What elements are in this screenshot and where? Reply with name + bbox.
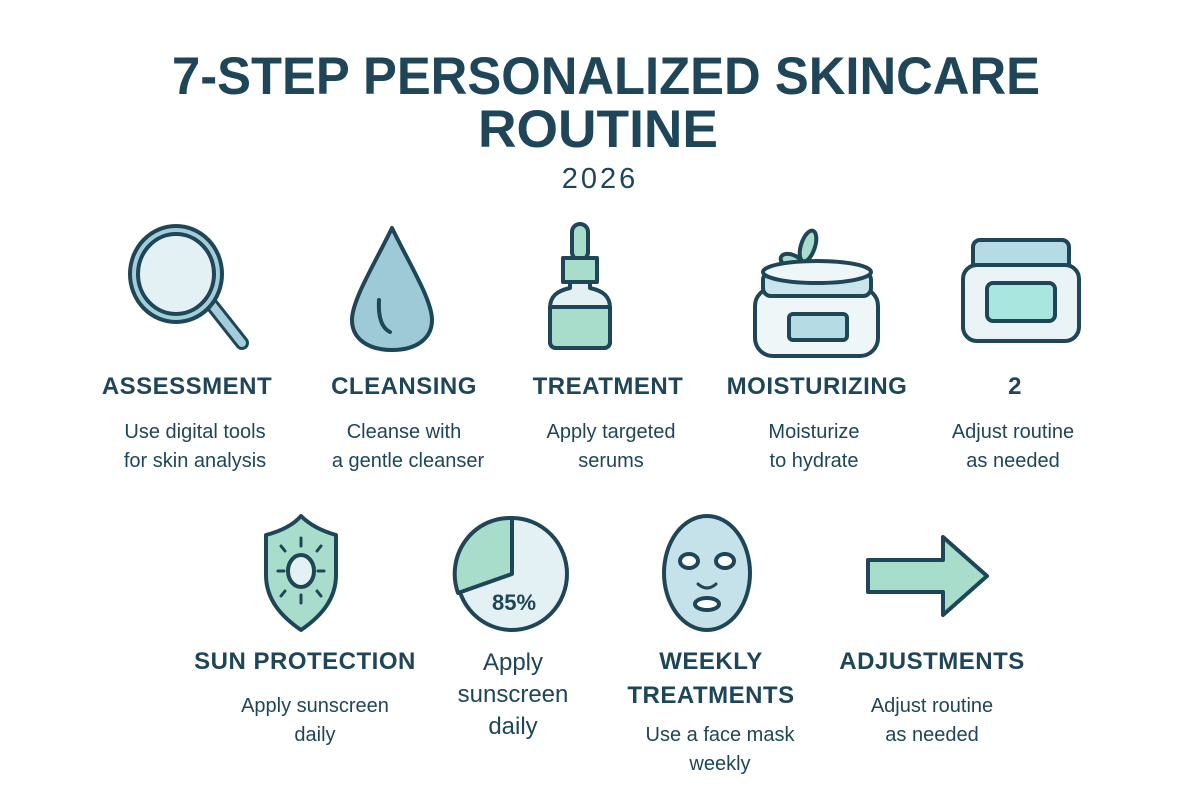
- step: 2: Adjust routine: [952, 421, 1074, 443]
- icon: water drop: [352, 228, 432, 350]
- step: sun protection: daily: [294, 724, 336, 746]
- step: treatment: [533, 373, 683, 472]
- step: apply sunscreen: Apply: [483, 649, 543, 676]
- step: moisturizing: [727, 373, 907, 472]
- step: assessment: for skin analysis: [124, 450, 266, 472]
- step: cleansing: Cleanse with: [347, 421, 461, 443]
- step: apply sunscreen: [458, 649, 568, 740]
- icon: magnifier: [130, 226, 242, 343]
- title: 7-STEP PERSONALIZED SKINCARE: [172, 47, 1040, 106]
- step: weekly treatments: TREATMENTS: [627, 682, 795, 709]
- step: apply sunscreen: sunscreen: [458, 681, 568, 708]
- step: adjustments: ADJUSTMENTS: [839, 648, 1025, 675]
- icon: face mask: [664, 516, 750, 630]
- icon: jar: [963, 240, 1079, 341]
- step: adjustments: as needed: [885, 724, 979, 746]
- step: cleansing: [331, 373, 484, 472]
- step: apply sunscreen: daily: [488, 713, 538, 740]
- step: moisturizing: MOISTURIZING: [727, 373, 907, 400]
- step: adjustments: Adjust routine: [871, 695, 993, 717]
- step: weekly treatments: WEEKLY: [659, 648, 763, 675]
- step: sun protection: SUN PROTECTION: [194, 648, 416, 675]
- icon: dropper bottle: [550, 224, 610, 348]
- step: adjustments: [839, 648, 1025, 746]
- step: weekly treatments: Use a face mask: [646, 724, 795, 746]
- step: 2: as needed: [966, 450, 1060, 472]
- subtitle year: 2026: [562, 163, 638, 195]
- step: cleansing: CLEANSING: [331, 373, 477, 400]
- step: treatment: Apply targeted: [547, 421, 675, 443]
- step: 2: [952, 373, 1074, 472]
- step: cleansing: a gentle cleanser: [332, 450, 484, 472]
- step: weekly treatments: weekly: [688, 753, 751, 775]
- icon: moisturizer jar: [755, 229, 878, 356]
- step: assessment: [102, 373, 272, 472]
- step: weekly treatments: [627, 648, 795, 775]
- icon: arrow: [868, 537, 987, 615]
- step: 2: 2: [1008, 373, 1022, 400]
- step: moisturizing: to hydrate: [770, 450, 858, 472]
- step: sun protection: Apply sunscreen: [241, 695, 389, 717]
- step: assessment: Use digital tools: [124, 421, 266, 443]
- step: moisturizing: Moisturize: [768, 421, 860, 443]
- icon: pie chart 85%: [455, 518, 567, 630]
- icon: pie chart 85%: 85%: [492, 590, 536, 615]
- icon: shield with sun: [266, 516, 336, 630]
- step: sun protection: [194, 648, 416, 746]
- title: [172, 47, 1040, 159]
- step: assessment: ASSESSMENT: [102, 373, 272, 400]
- step: treatment: TREATMENT: [533, 373, 683, 400]
- title: ROUTINE: [478, 100, 718, 159]
- step: treatment: serums: [578, 450, 644, 472]
